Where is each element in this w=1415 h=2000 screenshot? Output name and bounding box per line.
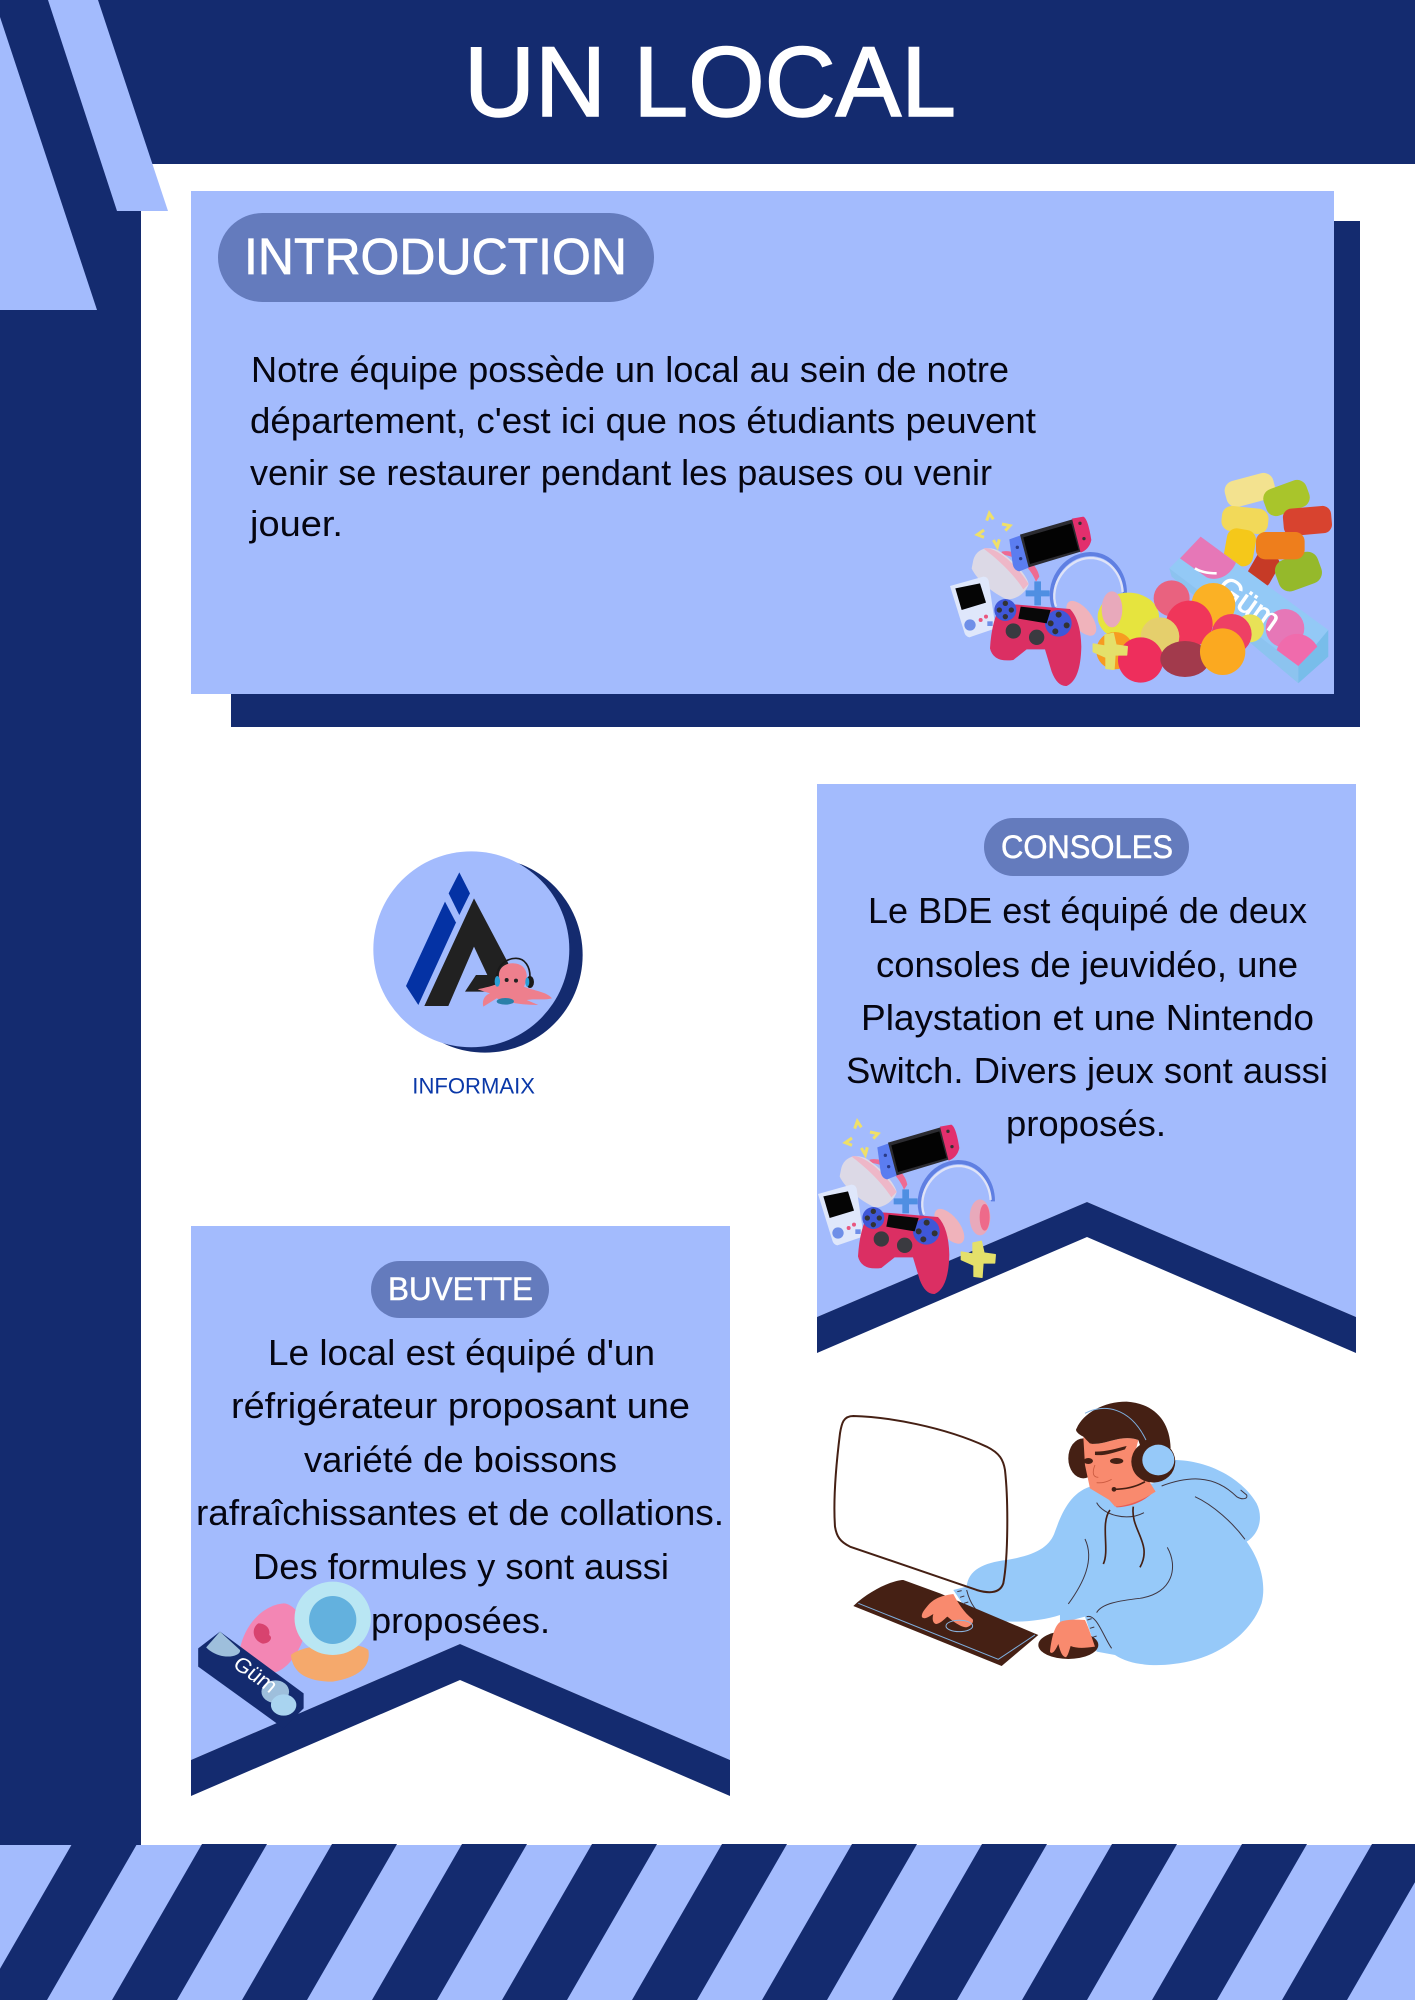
consoles text xyxy=(846,890,1328,1144)
header decorative strip xyxy=(48,0,168,211)
buvette text: Des formules y sont aussi xyxy=(253,1546,669,1587)
drawstrings xyxy=(1103,1507,1144,1567)
banner background xyxy=(191,1226,730,1760)
introduction text: venir se restaurer pendant les pauses ou venir xyxy=(250,452,992,493)
logo label: INFORMAIX xyxy=(412,1073,535,1098)
introduction text: département, c'est ici que nos étudiants peuvent xyxy=(250,400,1036,441)
keyboard xyxy=(853,1580,1038,1666)
buvette text: proposées. xyxy=(371,1600,550,1641)
buvette text: variété de boissons xyxy=(304,1439,617,1480)
logo xyxy=(373,851,583,1098)
consoles text: Switch. Divers jeux sont aussi xyxy=(846,1050,1328,1091)
panel background xyxy=(191,191,1334,694)
icon: game consoles xyxy=(818,1121,995,1294)
heading: buvette xyxy=(371,1261,549,1318)
panel: buvette xyxy=(191,1226,730,1796)
consoles text: consoles de jeuvidéo, une xyxy=(876,944,1298,985)
icon: candies and gum: Güm xyxy=(1210,569,1288,638)
introduction text: jouer. xyxy=(249,503,343,544)
icon: game consoles xyxy=(950,513,1127,686)
header decorative wedge xyxy=(0,17,97,310)
introduction text: Notre équipe possède un local au sein de notre xyxy=(251,349,1009,390)
heading: buvette: BUVETTE xyxy=(388,1271,533,1307)
buvette text: Le local est équipé d'un xyxy=(268,1332,655,1373)
title: UN LOCAL xyxy=(464,26,956,137)
icon: candies and gum xyxy=(1093,471,1333,683)
illustration: gamer at computer xyxy=(834,1402,1263,1666)
icon: octopus mascot xyxy=(478,958,552,1007)
head xyxy=(1068,1402,1175,1507)
header band xyxy=(0,0,1415,164)
panel: introduction xyxy=(191,191,1360,727)
panel shadow xyxy=(231,221,1360,727)
heading: introduction xyxy=(218,213,654,302)
consoles text: Playstation et une Nintendo xyxy=(861,997,1314,1038)
banner background xyxy=(817,784,1356,1317)
monitor outline xyxy=(834,1416,1007,1592)
banner chevron xyxy=(191,1644,730,1796)
consoles text: proposés. xyxy=(1006,1103,1166,1144)
hand on mouse xyxy=(1050,1620,1095,1657)
consoles text: Le BDE est équipé de deux xyxy=(868,890,1307,931)
buvette text xyxy=(196,1332,724,1641)
buvette text: réfrigérateur proposant une xyxy=(231,1385,690,1426)
icon: candies and gum pack xyxy=(198,1582,371,1728)
heading: introduction: INTRODUCTION xyxy=(244,228,627,285)
panel: consoles xyxy=(817,784,1356,1353)
logo mark xyxy=(406,872,508,1006)
buvette text: rafraîchissantes et de collations. xyxy=(196,1492,724,1533)
logo circle shadow xyxy=(387,857,583,1053)
hoodie xyxy=(953,1460,1263,1665)
left sidebar xyxy=(0,0,141,1845)
mouse xyxy=(1038,1631,1098,1659)
footer stripes xyxy=(0,1844,1415,2000)
hand on keyboard xyxy=(922,1594,973,1627)
icon: candies and gum pack: Güm xyxy=(228,1651,283,1698)
hoodie lines xyxy=(957,1479,1247,1648)
heading: consoles xyxy=(984,818,1189,876)
banner chevron xyxy=(817,1202,1356,1353)
logo circle xyxy=(373,851,569,1047)
heading: consoles: CONSOLES xyxy=(1001,829,1173,865)
introduction text xyxy=(249,349,1036,544)
